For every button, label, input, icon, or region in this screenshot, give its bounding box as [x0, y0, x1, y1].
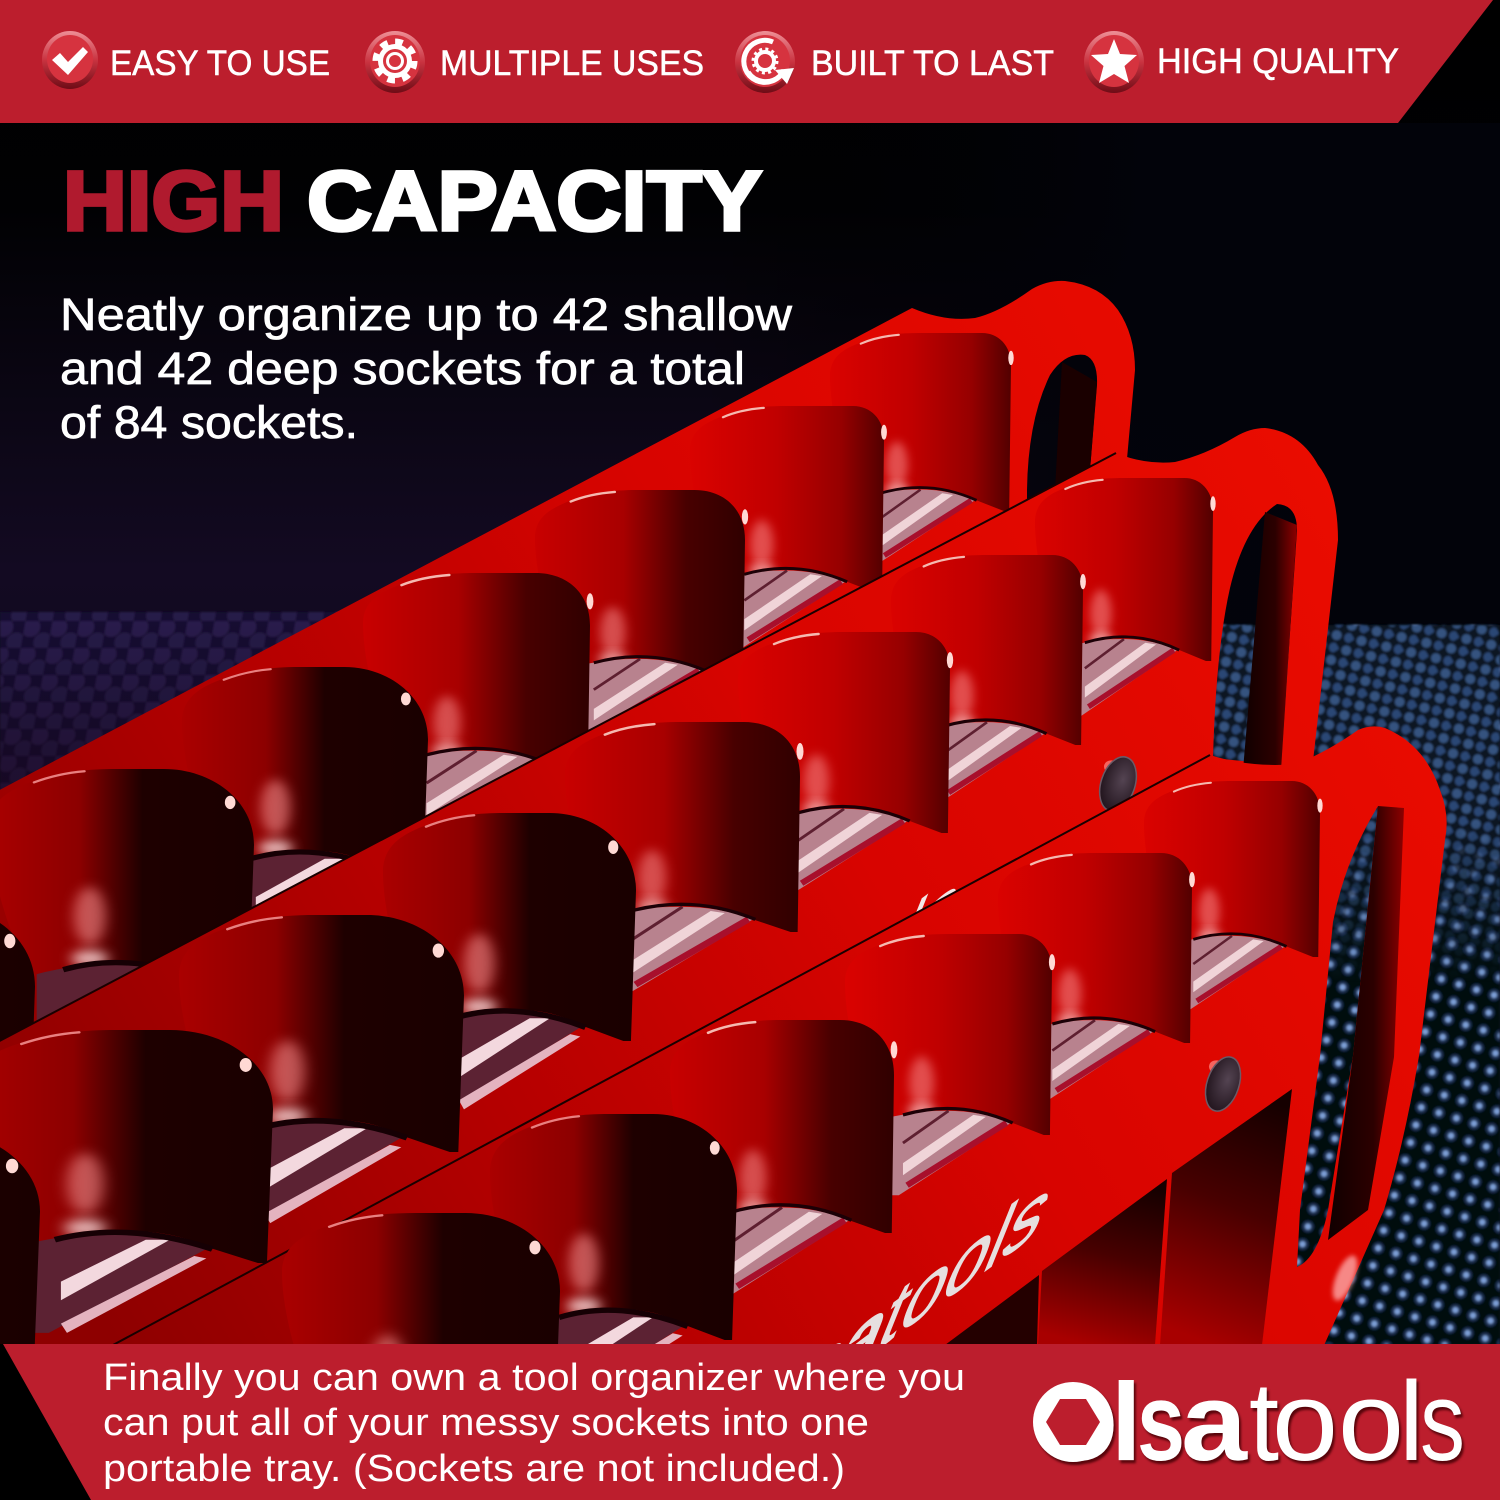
brand logo: a [1181, 1361, 1248, 1484]
brand logo: O [1040, 1370, 1118, 1482]
rivet: middle tray [1098, 756, 1138, 810]
label: built to last: BUILT TO LAST [811, 44, 1054, 83]
dotted mat, left purple [0, 612, 340, 812]
heading [63, 154, 762, 248]
label: multiple uses: MULTIPLE USES [440, 44, 704, 83]
brand logo [1033, 1359, 1465, 1484]
description text: of 84 sockets. [60, 397, 358, 448]
tray: middle [0, 428, 1338, 1344]
tray engraved logo: satools [779, 1151, 1069, 1435]
red socket trays photo [0, 280, 1447, 1344]
brand logo: s [1137, 1361, 1185, 1484]
windows in the front face [1160, 1089, 1292, 1345]
dotted mat, right blue [1213, 623, 1500, 1344]
rivet: front tray [1204, 1056, 1242, 1112]
brand logo: l [1111, 1361, 1142, 1484]
icon: cycle gear [735, 31, 795, 93]
icon: star [1084, 31, 1144, 93]
brand logo: oo [1272, 1359, 1404, 1484]
heading: CAPACITY [307, 154, 762, 248]
heading: HIGH [63, 154, 284, 248]
label: easy to use: EASY TO USE [110, 44, 330, 83]
bottom banner [0, 1344, 1500, 1500]
bottom text: can put all of your messy sockets into one [103, 1402, 869, 1444]
label: high quality: HIGH QUALITY [1157, 42, 1399, 81]
icon: check [42, 31, 98, 89]
brand logo: l [1399, 1359, 1424, 1484]
description text [60, 289, 793, 448]
bottom text: portable tray. (Sockets are not included.) [103, 1448, 845, 1490]
tray: back [0, 280, 1135, 1040]
bottom text: Finally you can own a tool organizer where you [103, 1357, 965, 1399]
brand logo: s [1420, 1359, 1465, 1484]
icon: gear [365, 31, 425, 93]
brand logo: t [1249, 1359, 1279, 1484]
tray logo fragment: ls [883, 847, 977, 986]
top banner [0, 0, 1493, 123]
tray: front [112, 726, 1447, 1344]
description text: and 42 deep sockets for a total [60, 343, 745, 394]
bottom text [103, 1357, 965, 1490]
description text: Neatly organize up to 42 shallow [60, 289, 793, 340]
